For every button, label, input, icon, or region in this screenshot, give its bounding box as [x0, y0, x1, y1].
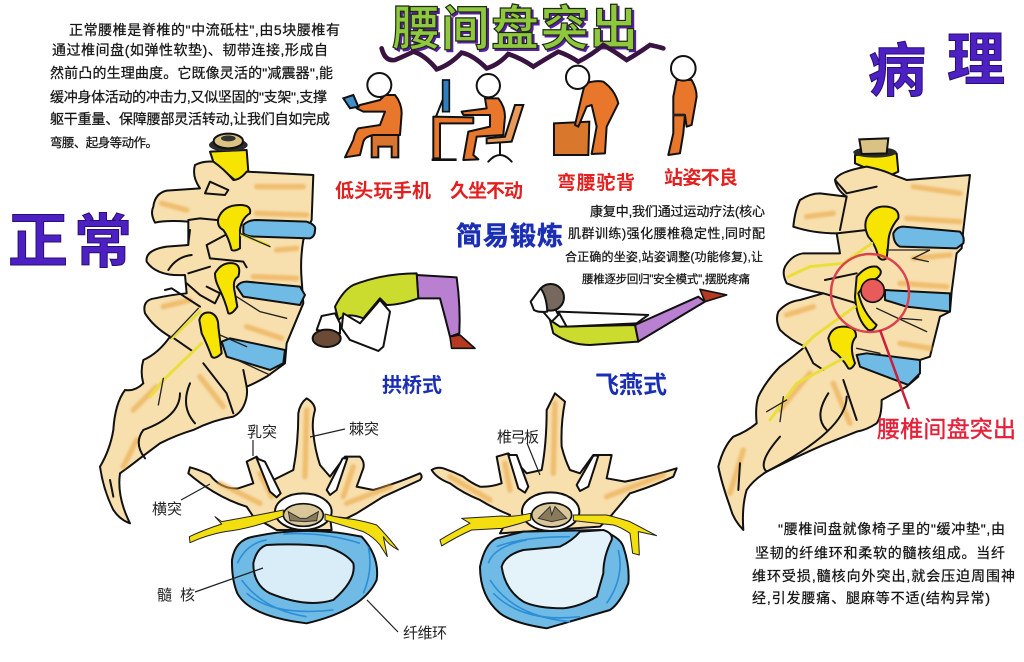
text block: disc explanation [752, 521, 1015, 606]
text block: normal lumbar intro: 缓冲身体活动的冲击力,又似坚固的"支架",支撑 [50, 89, 327, 105]
title wavy underline [382, 45, 663, 69]
text block: normal lumbar intro: 正常腰椎是脊椎的"中流砥柱",由5块腰椎有 [69, 22, 340, 38]
heading: pathology [868, 28, 1005, 104]
anatomy labels with leaders: 乳突 [247, 424, 277, 441]
icon: sitting with phone [343, 73, 402, 157]
icon: sitting at desk [432, 74, 523, 162]
cause labels [335, 166, 738, 202]
cause labels: 弯腰驼背 [557, 171, 635, 194]
label: bridge pose: 拱桥式 [382, 374, 442, 397]
title: 腰间盘突出 [392, 3, 638, 56]
heading: pathology: 理 [947, 28, 1005, 93]
text block: rehabilitation: 腰椎逐步回归"安全模式",摆脱疼痛 [582, 272, 750, 286]
diagram: herniated lumbar spine side view [718, 138, 970, 530]
label: lumbar disc herniation: 腰椎间盘突出 [877, 416, 1016, 442]
diagram: normal lumbar spine side view [100, 134, 315, 523]
heading: simple exercises: 简易锻炼 [456, 221, 563, 251]
icon: bending to lift box [554, 66, 618, 155]
heading: normal [8, 208, 132, 275]
diagram: herniated axial section [432, 393, 677, 628]
icon: superman exercise [531, 284, 727, 345]
text block: rehabilitation: 合正确的坐姿,站姿调整(功能修复),让 [565, 249, 763, 264]
cause labels: 低头玩手机 [335, 180, 431, 202]
anatomy labels with leaders: 椎弓板 [497, 428, 539, 446]
text block: disc explanation: 经,引发腰痛、腿麻等不适(结构异常) [752, 590, 990, 606]
icon: poor standing posture [668, 56, 697, 155]
text block: disc explanation: 维环受损,髓核向外突出,就会压迫周围神 [752, 568, 1015, 584]
anatomy labels with leaders: 横突 [152, 501, 182, 518]
text block: disc explanation: "腰椎间盘就像椅子里的"缓冲垫",由 [778, 521, 1005, 537]
text block: normal lumbar intro: 通过椎间盘(如弹性软垫)、韧带连接,形成自 [52, 42, 328, 58]
diagram: normal axial section [188, 398, 422, 623]
text block: normal lumbar intro [50, 22, 340, 150]
text block: rehabilitation: 肌群训练)强化腰椎稳定性,同时配 [568, 226, 765, 241]
text block: normal lumbar intro: 躯干重量、保障腰部灵活转动,让我们自如完成 [50, 111, 330, 127]
icon: bridge exercise [313, 273, 475, 351]
text block: normal lumbar intro: 弯腰、起身等动作。 [50, 135, 158, 150]
heading: normal: 正 [8, 208, 68, 275]
label: swallow pose: 飞燕式 [595, 372, 667, 399]
anatomy labels with leaders: 棘突 [349, 421, 379, 438]
text block: normal lumbar intro: 然前凸的生理曲度。它既像灵活的"减震器",能 [50, 65, 333, 81]
anatomy labels with leaders: 纤维环 [403, 625, 447, 642]
heading: pathology: 病 [868, 39, 926, 104]
anatomy labels with leaders [152, 421, 540, 642]
anatomy labels with leaders: 髓核 [157, 587, 195, 604]
herniated nucleus [861, 279, 884, 302]
heading: normal: 常 [74, 210, 132, 275]
highlight circle and leader: herniation [831, 254, 909, 409]
cause labels: 久坐不动 [450, 180, 523, 202]
text block: rehabilitation [565, 204, 765, 286]
text block: rehabilitation: 康复中,我们通过运动疗法(核心 [590, 204, 765, 219]
title: 腰间盘突出 [394, 5, 640, 58]
cause labels: 站姿不良 [664, 166, 738, 189]
text block: disc explanation: 坚韧的纤维环和柔软的髓核组成。当纤 [755, 545, 1005, 561]
